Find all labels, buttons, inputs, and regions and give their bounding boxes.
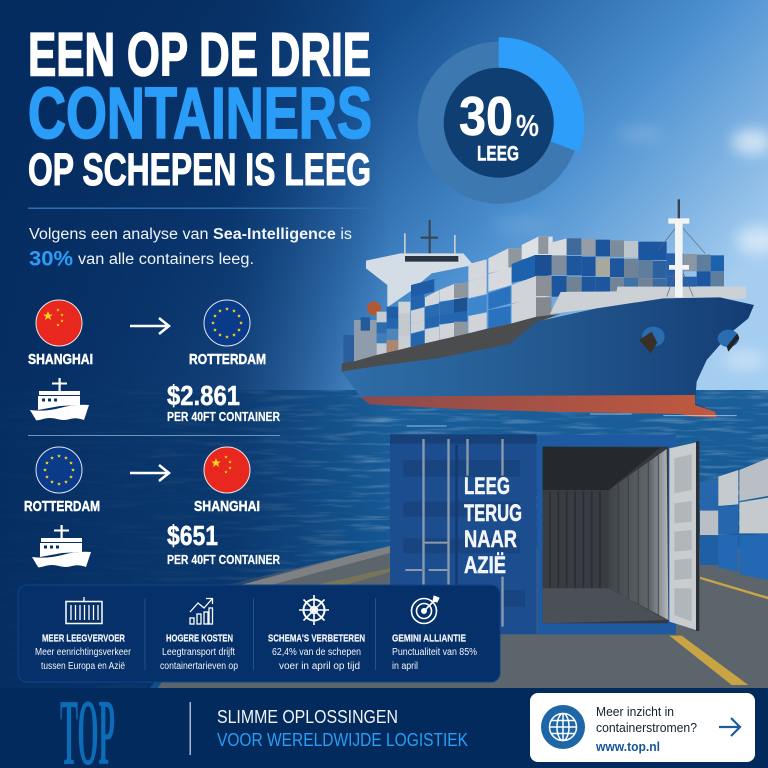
background: clouds	[492, 128, 768, 369]
flag: EU	[36, 447, 82, 493]
call to action card	[530, 693, 755, 762]
fact: schema's verbeteren: SCHEMA'S VERBETEREN	[268, 634, 365, 644]
fact: gemini alliantie: Punctualiteit van 85%	[392, 647, 477, 658]
price unit: PER 40FT CONTAINER	[167, 410, 280, 424]
icon: rising chart	[190, 598, 212, 624]
price: $2.861	[167, 380, 240, 411]
fact: meer leegvervoer: Meer eenrichtingsverkeer	[35, 647, 132, 658]
fact: hogere kosten	[160, 598, 238, 672]
open container	[390, 434, 699, 634]
title line 2: CONTAINERS	[28, 74, 372, 154]
foremast	[658, 199, 705, 297]
title	[28, 20, 372, 195]
route: Shanghai to Rotterdam	[28, 300, 280, 424]
donut chart: 30 percent empty: LEEG	[477, 142, 519, 166]
background: sea	[0, 390, 768, 688]
fact: gemini alliantie: GEMINI ALLIANTIE	[392, 634, 466, 644]
icon: ship wheel	[299, 595, 329, 625]
arrow	[719, 718, 740, 736]
intro text	[29, 226, 352, 270]
footer tagline	[217, 707, 468, 750]
intro text: 30%	[29, 248, 73, 270]
flag: China	[204, 447, 250, 493]
stacked containers on the quay	[390, 434, 768, 685]
arrow	[130, 318, 169, 334]
footer tagline: VOOR WERELDWIJDE LOGISTIEK	[217, 730, 468, 750]
donut chart: 30 percent empty: %	[516, 108, 539, 143]
fact: gemini alliantie: in april	[392, 661, 418, 672]
price unit: PER 40FT CONTAINER	[167, 553, 280, 567]
fact: schema's verbeteren: voer in april op tijd	[279, 661, 360, 672]
footer tagline: SLIMME OPLOSSINGEN	[217, 707, 398, 727]
ship superstructure	[366, 220, 473, 315]
flag: EU	[204, 300, 250, 346]
fact: schema's verbeteren: 62,4% van de schepen	[272, 647, 361, 658]
fact: hogere kosten: Leegtransport drijft	[162, 647, 235, 658]
door text: leeg terug naar Azië: LEEG	[464, 473, 510, 500]
fact: hogere kosten: HOGERE KOSTEN	[166, 634, 233, 644]
deck lashing band	[342, 314, 560, 373]
closed door with locking bars	[390, 434, 537, 634]
label: Rotterdam: ROTTERDAM	[189, 351, 266, 368]
donut chart: 30 percent empty: 30	[459, 85, 513, 147]
price: $651	[167, 520, 218, 551]
stacked containers	[343, 237, 746, 363]
bow wake	[407, 414, 737, 426]
icon: ship	[30, 378, 89, 420]
intro text: van alle containers leeg.	[78, 251, 254, 268]
icon: target	[412, 596, 439, 624]
flag: China	[36, 300, 82, 346]
label: Shanghai: SHANGHAI	[28, 351, 93, 368]
fact: hogere kosten: containertarieven op	[160, 661, 238, 672]
container ship	[342, 199, 754, 426]
open door	[669, 441, 699, 631]
door text: leeg terug naar Azië: NAAR	[464, 526, 517, 553]
fact: schema's verbeteren	[268, 595, 365, 672]
dark overlay on the left	[0, 0, 390, 688]
door text: leeg terug naar Azië: AZIË	[464, 552, 506, 579]
door text: leeg terug naar Azië: TERUG	[464, 500, 522, 527]
title line 1: EEN OP DE DRIE	[28, 20, 371, 88]
donut chart: 30 percent empty	[418, 37, 584, 204]
background: sky	[0, 0, 768, 440]
background: quay	[150, 546, 768, 700]
intro text: Volgens een analyse van Sea-Intelligence is	[29, 226, 352, 243]
footer band	[0, 688, 768, 768]
icon: container	[66, 597, 102, 624]
label: Rotterdam: ROTTERDAM	[24, 498, 100, 515]
icon: ship	[32, 525, 91, 567]
door text: leeg terug naar Azië	[464, 473, 522, 579]
icon: globe	[541, 705, 585, 749]
ship hull	[342, 297, 754, 417]
fact: gemini alliantie	[392, 596, 477, 672]
call to action text: www.top.nl	[595, 739, 660, 754]
route: Rotterdam to Shanghai	[24, 447, 280, 567]
arrow	[130, 465, 169, 481]
fact: meer leegvervoer: tussen Europa en Azië	[41, 661, 125, 672]
call to action text: containerstromen?	[596, 720, 697, 735]
title line 3: OP SCHEPEN IS LEEG	[28, 144, 371, 195]
call to action text	[595, 704, 697, 754]
call to action text: Meer inzicht in	[596, 704, 674, 719]
panel: key facts	[18, 585, 500, 682]
label: Shanghai: SHANGHAI	[194, 498, 260, 515]
fact: meer leegvervoer	[35, 597, 132, 672]
fact: meer leegvervoer: MEER LEEGVERVOER	[42, 634, 126, 644]
quay markings	[669, 577, 768, 685]
container interior	[537, 435, 676, 634]
